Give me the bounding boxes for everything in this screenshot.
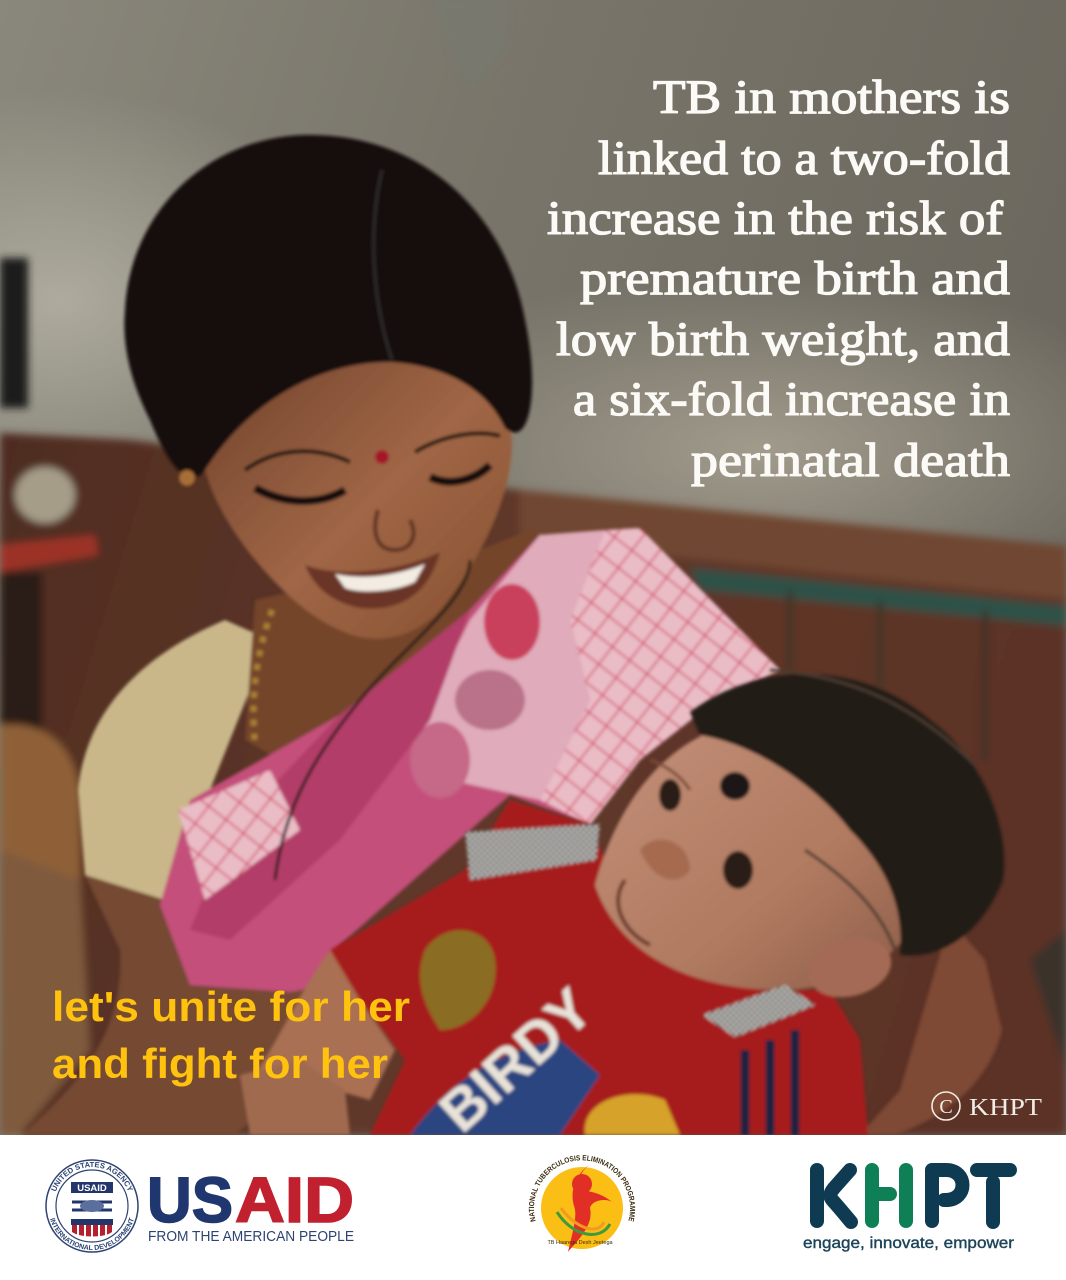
USAID seal <box>45 1159 139 1253</box>
logo: National TB Elimination Programme: NATIONAL TUBERCULOSIS ELIMINATION PROGRAMME <box>528 1155 636 1222</box>
logo: National TB Elimination Programme <box>528 1155 636 1252</box>
USAID wordmark: US <box>147 1164 233 1236</box>
sari <box>160 528 780 992</box>
mother's right arm <box>860 920 1002 1135</box>
face <box>205 330 512 639</box>
logo: National TB Elimination Programme: TB Haarega Desh Jeetega <box>547 1240 614 1246</box>
USAID seal: INTERNATIONAL DEVELOPMENT <box>50 1217 134 1250</box>
KHPT letters <box>817 1170 1010 1222</box>
yellow print <box>420 930 496 1030</box>
red shirt <box>330 800 868 1135</box>
baby hair <box>690 674 1004 955</box>
headline text: premature birth and <box>580 252 1010 305</box>
headline text <box>547 71 1010 487</box>
headline text: linked to a two-fold <box>598 132 1010 185</box>
logo: KHPT <box>803 1170 1015 1252</box>
hair <box>124 135 532 478</box>
headline text: increase in the risk of <box>547 192 1003 245</box>
photo credit <box>932 1092 1042 1121</box>
photo credit: C <box>939 1096 953 1118</box>
KHPT tagline: engage, innovate, empower <box>803 1235 1015 1252</box>
headline text: a six-fold increase in <box>573 373 1010 426</box>
slogan: and fight for her <box>52 1040 388 1087</box>
slogan: let's unite for her <box>52 983 410 1030</box>
logo bar <box>0 1135 1066 1280</box>
photo credit: KHPT <box>969 1095 1042 1121</box>
headline text: perinatal death <box>691 434 1010 487</box>
mother: blouse, arm, face and hair <box>22 135 780 1135</box>
headline text: low birth weight, and <box>556 313 1010 366</box>
baby: shirt, head and hair <box>240 670 1004 1145</box>
logo: USAID <box>45 1159 354 1253</box>
USAID seal: USAID <box>77 1183 107 1194</box>
USAID tagline: FROM THE AMERICAN PEOPLE <box>148 1228 354 1245</box>
face details <box>245 451 350 470</box>
USAID wordmark: AID <box>235 1164 354 1236</box>
baby face details <box>720 772 750 800</box>
USAID wordmark <box>147 1164 354 1236</box>
neck <box>245 530 555 760</box>
USAID seal: UNITED STATES AGENCY <box>51 1162 134 1191</box>
checked collar <box>465 824 600 880</box>
necklace <box>275 560 470 880</box>
shirt print lettering: BIRDY <box>427 976 605 1145</box>
headline text: TB in mothers is <box>653 71 1010 124</box>
baby face <box>595 720 925 990</box>
slogan <box>52 983 410 1087</box>
